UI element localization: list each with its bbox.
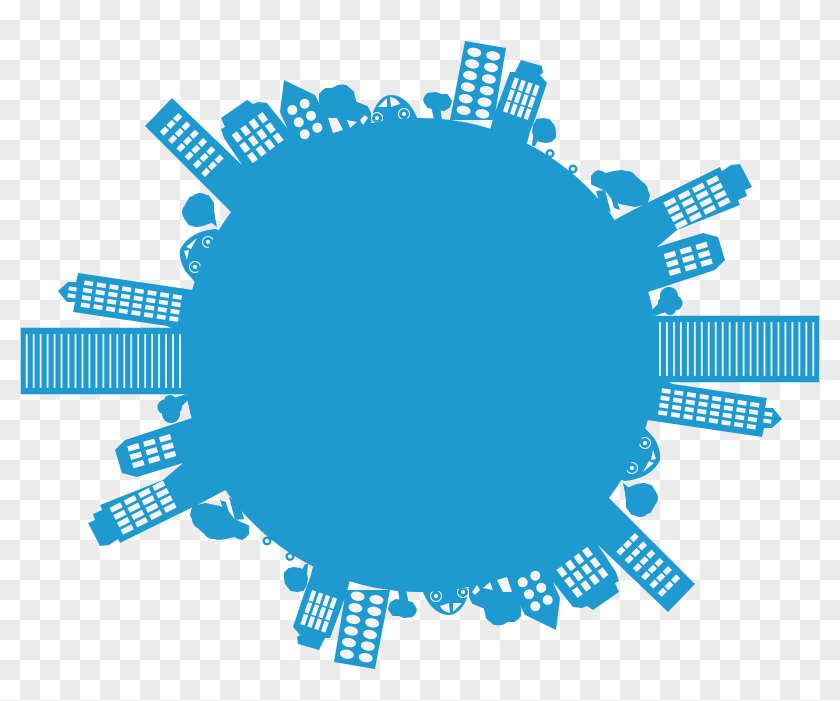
tree group top xyxy=(320,84,370,140)
small tree bottom xyxy=(389,590,416,618)
tall building upper left xyxy=(145,98,330,212)
short building right xyxy=(610,233,725,295)
bottom car xyxy=(422,586,469,615)
right car xyxy=(612,428,660,481)
stepped building upper left xyxy=(221,100,330,210)
short building left xyxy=(115,415,230,477)
tree group bottom xyxy=(470,570,520,626)
small tree right xyxy=(652,287,682,316)
wheels on horizon xyxy=(546,149,578,174)
building lower left xyxy=(88,440,235,546)
right long building xyxy=(640,316,819,382)
tower building bottom left xyxy=(293,560,350,650)
oval window building bottom xyxy=(334,590,390,669)
big tree upper right xyxy=(592,170,649,213)
small tree left xyxy=(158,394,188,423)
left long building xyxy=(21,328,200,394)
planet disc xyxy=(183,118,657,592)
wheels on lower horizon xyxy=(262,536,294,561)
right lower building xyxy=(640,370,782,437)
building upper right xyxy=(605,164,752,270)
house with round windows xyxy=(280,80,345,175)
oval window building xyxy=(450,41,506,120)
small tree left of tower xyxy=(284,564,308,591)
tall building lower right xyxy=(510,498,695,612)
small tree right of tower xyxy=(532,119,556,146)
house with round windows bottom xyxy=(495,535,560,630)
top car xyxy=(371,95,418,124)
left upper building xyxy=(58,273,200,340)
left car xyxy=(180,229,228,282)
right lower tree xyxy=(623,483,658,517)
small tree top xyxy=(424,92,451,120)
left tree xyxy=(182,193,217,227)
stepped building lower right xyxy=(510,500,619,610)
big tree lower left xyxy=(191,497,248,540)
tower building top right xyxy=(490,60,547,150)
